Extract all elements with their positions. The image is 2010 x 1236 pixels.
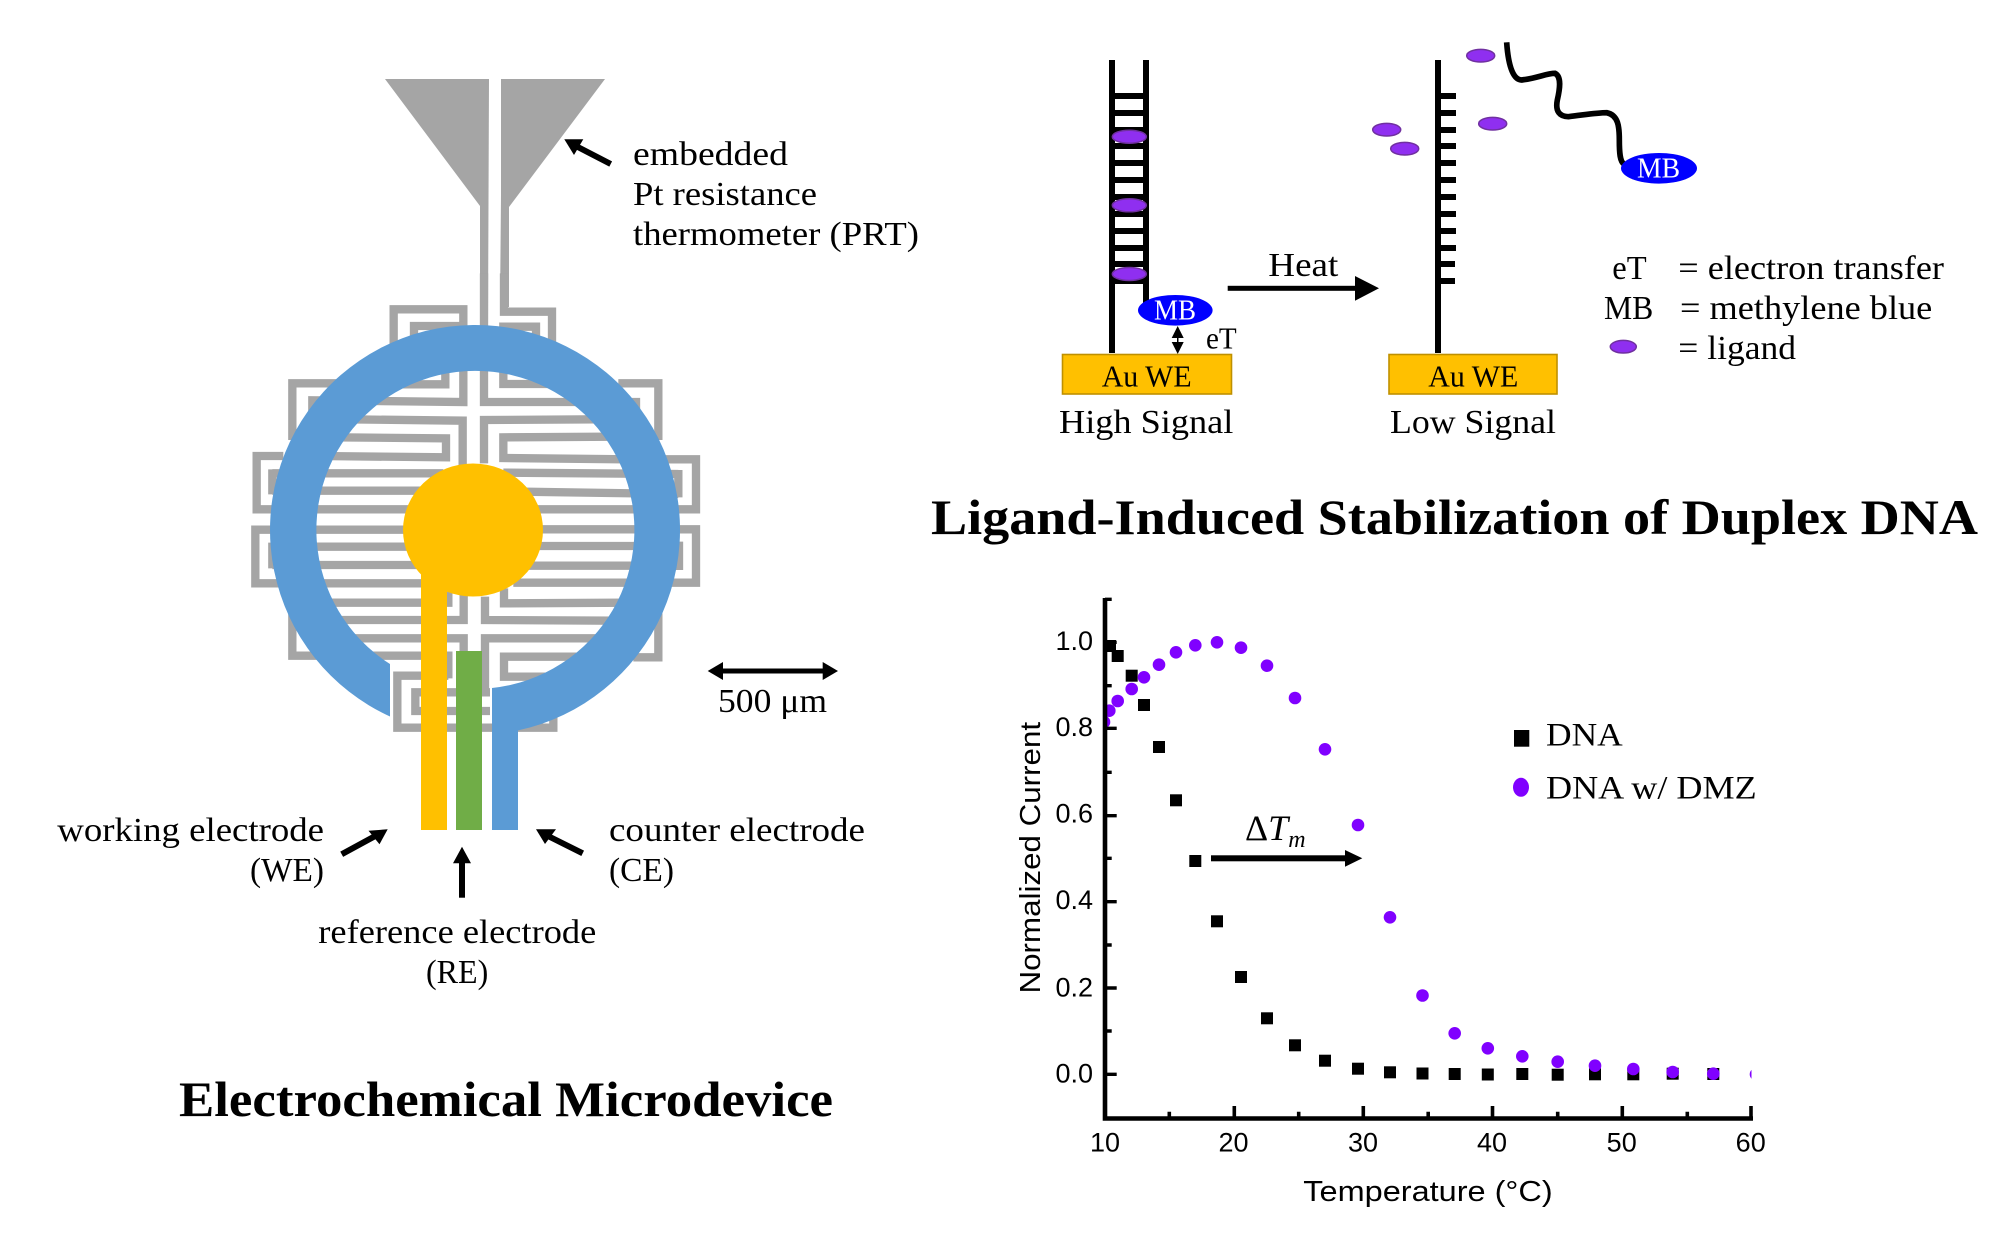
eT label: eT <box>1206 321 1237 356</box>
label: counter electrode: counter electrode <box>609 812 865 849</box>
gold working electrode, high signal <box>1062 354 1232 394</box>
key <box>1604 250 1945 367</box>
gold working electrode, low signal: Au WE <box>1428 359 1518 394</box>
delta Tm arrow <box>1211 850 1362 867</box>
free ligands <box>1373 49 1507 155</box>
methylene blue tag, low signal: MB <box>1637 153 1680 184</box>
delta Tm label: ΔT <box>1245 808 1288 848</box>
x axis tick labels: 30 <box>1348 1128 1378 1158</box>
legend: DNA: DNA <box>1546 718 1623 754</box>
y axis tick labels: 0.2 <box>1055 973 1093 1003</box>
heat arrow <box>1228 276 1379 301</box>
label: reference electrode: (RE) <box>426 954 488 991</box>
panel: electrochemical microdevice <box>57 79 919 1127</box>
y axis title: Normalized Current <box>1015 722 1047 994</box>
label: reference electrode: reference electrode <box>318 914 596 951</box>
panel: melting curve chart <box>1015 598 1766 1208</box>
gold working electrode, low signal <box>1389 354 1557 394</box>
methylene blue tag, high signal: MB <box>1154 295 1196 326</box>
x axis title: Temperature (°C) <box>1303 1176 1553 1208</box>
label: working electrode <box>57 812 324 889</box>
legend: DNA <box>1514 718 1623 754</box>
label: counter electrode: (CE) <box>609 852 674 889</box>
arrow: counter electrode <box>536 829 583 853</box>
electron transfer arrow <box>1172 326 1184 354</box>
y axis tick labels: 0.4 <box>1055 885 1093 915</box>
delta Tm label: m <box>1288 827 1306 853</box>
label: embedded Pt resistance thermometer <box>633 136 919 253</box>
low signal single strand <box>1435 60 1456 353</box>
scale label: 500 μm <box>718 683 827 720</box>
released strand <box>1507 42 1624 164</box>
key: eT <box>1612 250 1647 287</box>
label: working electrode: (WE) <box>250 852 324 889</box>
label: working electrode: working electrode <box>57 812 324 849</box>
gold working electrode, high signal: Au WE <box>1102 359 1192 394</box>
key: = ligand <box>1678 330 1796 367</box>
high signal duplex DNA <box>1109 60 1149 353</box>
title: ligand-induced stabilization: Ligand-Induced Stabilization of Duplex DNA <box>931 489 1978 545</box>
label: reference electrode <box>318 914 596 991</box>
y axis tick labels: 0.8 <box>1055 712 1093 742</box>
x axis tick labels <box>1090 1128 1766 1158</box>
x axis tick labels: 60 <box>1736 1128 1766 1158</box>
x axis tick labels: 10 <box>1090 1128 1120 1158</box>
y axis tick labels: 0.6 <box>1055 799 1093 829</box>
key: MB <box>1604 290 1653 327</box>
arrow: working electrode <box>342 829 388 854</box>
methylene blue tag, low signal <box>1621 153 1697 184</box>
y axis tick labels: 1.0 <box>1055 626 1093 656</box>
arrow: PRT <box>564 139 611 164</box>
x axis tick labels: 20 <box>1218 1128 1249 1158</box>
x axis tick labels: 40 <box>1477 1128 1507 1158</box>
chart axes and ticks <box>1105 598 1753 1118</box>
arrow: reference electrode <box>453 847 471 898</box>
panel: DNA schematic <box>931 42 1978 545</box>
legend: DNA w/ DMZ: DNA w/ DMZ <box>1546 770 1757 806</box>
label: embedded Pt resistance thermometer: embedded <box>633 136 788 173</box>
y axis tick labels <box>1055 626 1093 1088</box>
working electrode <box>403 464 543 830</box>
label: embedded Pt resistance thermometer: thermometer (PRT) <box>633 216 919 253</box>
serpentine Pt thermometer traces <box>255 273 696 728</box>
methylene blue tag, high signal <box>1138 295 1213 326</box>
title: electrochemical microdevice: Electrochemical Microdevice <box>179 1071 833 1127</box>
key: = methylene blue <box>1680 290 1932 327</box>
DNA data points <box>1104 640 1719 1081</box>
heat label: Heat <box>1268 247 1339 284</box>
scale arrow <box>708 662 838 680</box>
embedded Pt resistance thermometer contact pads <box>385 79 605 325</box>
reference electrode <box>456 651 482 830</box>
label: low signal: Low Signal <box>1390 404 1556 441</box>
label: counter electrode <box>609 812 865 889</box>
key: = electron transfer <box>1678 250 1945 287</box>
counter electrode ring <box>270 325 680 830</box>
x axis tick labels: 50 <box>1607 1128 1637 1158</box>
label: embedded Pt resistance thermometer: Pt resistance <box>633 176 817 213</box>
y axis tick labels: 0.0 <box>1055 1058 1093 1088</box>
label: high signal: High Signal <box>1059 404 1233 441</box>
DNA w/ DMZ data points <box>1098 636 1762 1081</box>
